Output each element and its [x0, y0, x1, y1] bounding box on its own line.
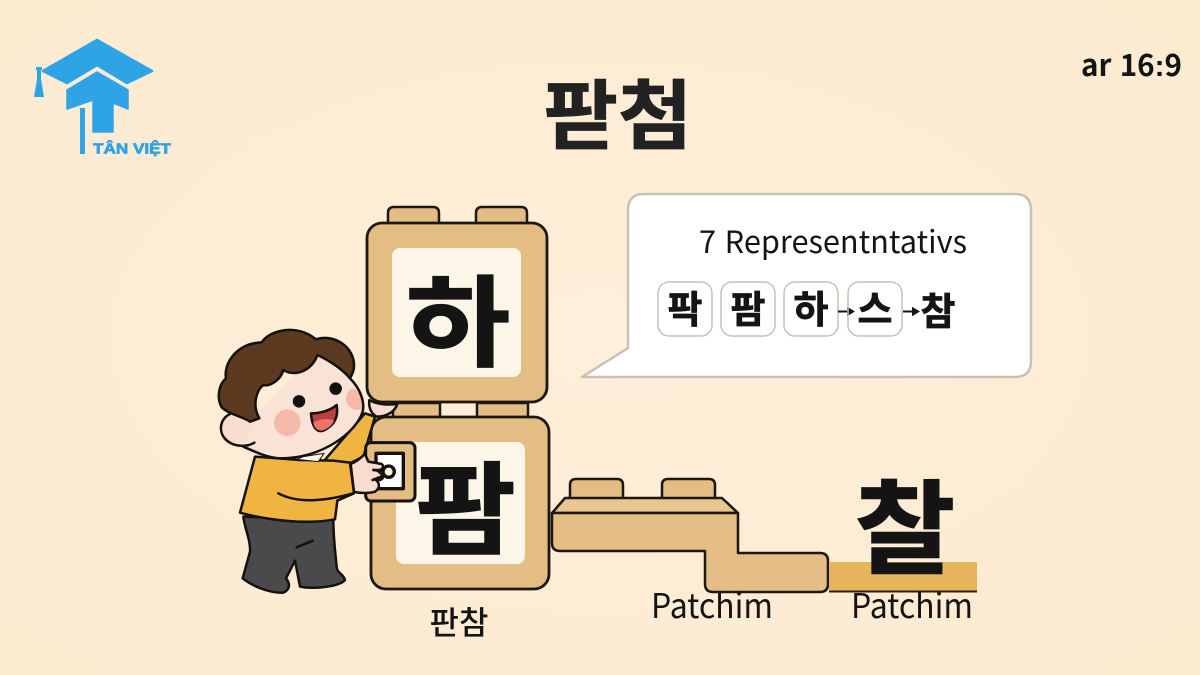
mouth [311, 405, 337, 431]
band base line [829, 590, 977, 592]
brick studs [570, 479, 715, 499]
block: top 하 [367, 207, 547, 402]
chip: 하 [784, 279, 838, 336]
face [243, 353, 363, 458]
brick: stepped patchim block [552, 479, 828, 592]
label: 판참: 판참 [430, 598, 488, 644]
block studs [388, 207, 527, 224]
bubble heading: 7 Representntativs [699, 217, 967, 262]
chip: 스: 스 [858, 279, 892, 334]
trousers [243, 517, 345, 593]
patchim example: 찰 on yellow band [829, 448, 977, 595]
ear outline [221, 414, 254, 446]
cheek: left [274, 409, 301, 436]
icon: tassel [34, 67, 44, 97]
tongue [313, 419, 334, 431]
eye: right [331, 384, 341, 394]
speech bubble [582, 194, 1031, 377]
sleeve line [278, 493, 353, 500]
brick body [366, 443, 415, 501]
label: Patchim under brick: Patchim [651, 579, 773, 628]
block body [367, 223, 547, 402]
brick window [376, 453, 403, 489]
sweater [240, 457, 354, 522]
face outline [243, 378, 363, 458]
chip: 하: 하 [794, 279, 829, 334]
syllable 하: 하 [406, 244, 510, 387]
hair [219, 330, 354, 422]
raised hand [369, 400, 397, 417]
logo wordmark: TÂN VIỆT [93, 140, 171, 158]
icon: graduation cap [43, 40, 152, 83]
syllable 찰: 찰 [855, 448, 955, 595]
syllable 참: 참 [921, 281, 955, 336]
chip: 팜: 팜 [731, 279, 765, 334]
syllable 팜: 팜 [415, 430, 516, 576]
small brick held by hand [366, 443, 415, 501]
icon: upward arrow [67, 72, 128, 132]
arrow: 스 to 참 [903, 308, 918, 314]
chip: 스 [848, 279, 902, 336]
block face [396, 442, 525, 564]
cheek: right [346, 389, 362, 410]
block: bottom 팜 [371, 403, 549, 589]
block body [371, 417, 549, 589]
ear [220, 413, 253, 447]
block studs [393, 403, 528, 418]
trouser crease [297, 541, 313, 547]
chip: 팍: 팍 [668, 279, 702, 334]
lower hand [351, 454, 383, 493]
arrow: 하 to 스 [838, 308, 853, 314]
brick bevel [552, 498, 738, 513]
title: 팓첨 [544, 55, 692, 165]
raised arm [323, 413, 375, 467]
yellow band [829, 562, 977, 591]
chip: 팜 [721, 279, 775, 336]
brick body [552, 513, 828, 592]
collar [297, 453, 324, 462]
chip: 팍 [658, 279, 712, 336]
logo bar [80, 108, 85, 154]
logo: Tan Viet graduation cap [34, 40, 171, 158]
finger lines to knob [373, 470, 383, 480]
block face [392, 248, 521, 377]
eye: left [294, 396, 304, 406]
label: Patchim under band: Patchim [851, 579, 973, 628]
aspect ratio label: ar 16:9 [1081, 41, 1182, 85]
bubble shape [582, 194, 1031, 377]
character: child stacking blocks [219, 330, 415, 593]
brick knob [383, 466, 394, 477]
